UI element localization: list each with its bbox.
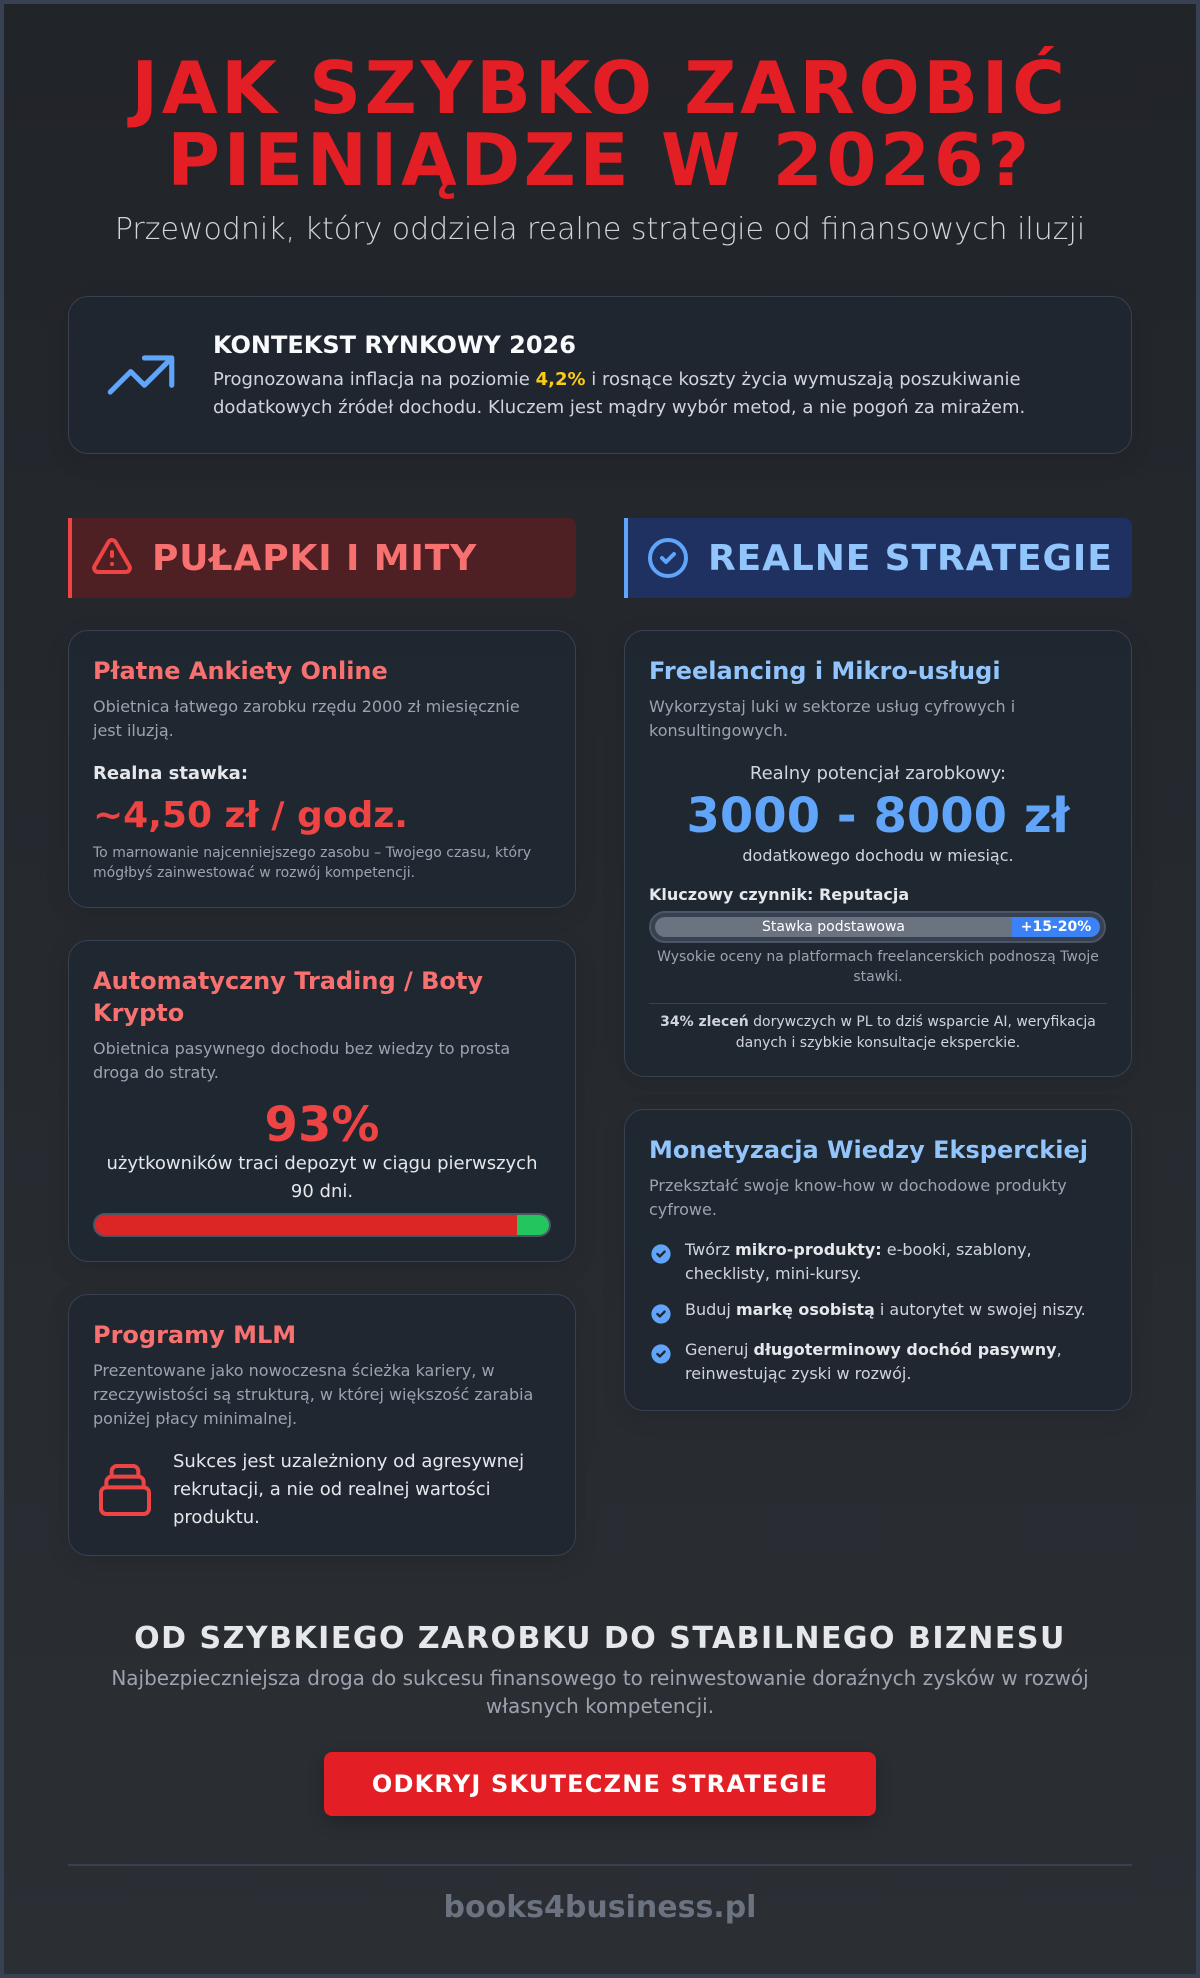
button: call to action [324, 1752, 876, 1816]
card title: Monetyzacja Wiedzy Eksperckiej [649, 1136, 1088, 1164]
icon: warning triangle [92, 538, 132, 574]
title [127, 46, 1069, 202]
panel heading: real strategies [624, 518, 1132, 598]
footer heading: OD SZYBKIEGO ZAROBKU DO STABILNEGO BIZNESU [134, 1621, 1066, 1656]
icon: collection stack [99, 1464, 151, 1516]
title: PIENIĄDZE W 2026? [167, 118, 1033, 202]
card description: Przekształć swoje know-how w dochodowe produkty [649, 1176, 1067, 1195]
panel: automated trading [68, 940, 576, 1262]
panel: freelancing [624, 630, 1132, 1077]
list item 3: reinwestując zyski w rozwój. [685, 1364, 911, 1382]
stat caption: użytkowników traci depozyt w ciągu pierwszych [106, 1153, 538, 1174]
stat caption [106, 1153, 538, 1202]
stat: hourly rate: ~4,50 zł / godz. [93, 794, 408, 836]
text: market context [213, 369, 1025, 418]
text: market context: Prognozowana inflacja na poziomie 4,2% i rosnące koszty życia wymuszają poszukiwanie [213, 369, 1021, 390]
text: recruitment warning [173, 1451, 524, 1528]
note: To marnowanie najcenniejszego zasobu – Twojego czasu, który [93, 845, 531, 861]
panel: paid surveys [68, 630, 576, 908]
bar: reputation rate [649, 911, 1106, 943]
icon: check 3 [651, 1344, 671, 1364]
card title: Programy MLM [93, 1321, 296, 1349]
list item 1 [684, 1240, 1032, 1282]
footer text: własnych kompetencji. [486, 1694, 714, 1718]
list item 3: Generuj długoterminowy dochód pasywny, [685, 1340, 1062, 1358]
heading text: strategies: REALNE STRATEGIE [708, 538, 1113, 578]
card title: Krypto [93, 999, 184, 1027]
card description [649, 1176, 1067, 1219]
card title: Automatyczny Trading / Boty [93, 967, 483, 995]
panel heading: traps and myths [68, 518, 576, 598]
icon: check 1 [651, 1244, 671, 1264]
card title [93, 967, 483, 1027]
card description: Obietnica łatwego zarobku rzędu 2000 zł miesięcznie [93, 697, 520, 716]
stat caption: dodatkowego dochodu w miesiąc. [742, 846, 1014, 864]
icon: check circle [648, 538, 688, 578]
subtitle: Przewodnik, który oddziela realne strategie od finansowych iluzji [115, 212, 1085, 247]
text: AI orders: 34% zleceń dorywczych w PL to dziś wsparcie AI, weryfikacja [660, 1014, 1096, 1030]
button: call to action: ODKRYJ SKUTECZNE STRATEGIE [372, 1770, 828, 1798]
icon: check 2 [651, 1304, 671, 1324]
bar segment: base rate: Stawka podstawowa [762, 919, 905, 935]
note: mógłbyś zainwestować w rozwój kompetencji. [93, 865, 415, 881]
card description [92, 697, 520, 740]
note [92, 845, 531, 881]
card description: konsultingowych. [649, 721, 788, 740]
bar note: stawki. [853, 969, 903, 985]
card description [93, 1039, 510, 1082]
heading text: traps: PUŁAPKI I MITY [152, 538, 477, 578]
card description [649, 697, 1015, 740]
heading: market context: KONTEKST RYNKOWY 2026 [213, 331, 576, 359]
list item 1: checklisty, mini-kursy. [685, 1264, 861, 1282]
bar note [657, 949, 1099, 985]
list item 2: Buduj markę osobistą i autorytet w swojej niszy. [685, 1300, 1086, 1318]
brand logo text: books4business.pl [444, 1890, 756, 1925]
card description: cyfrowe. [649, 1200, 717, 1219]
list item 3 [685, 1340, 1062, 1382]
stat caption: 90 dni. [291, 1181, 353, 1202]
icon: trending up [108, 355, 174, 395]
panel: MLM programs [68, 1294, 576, 1556]
text: AI orders: danych i szybkie konsultacje eksperckie. [736, 1034, 1020, 1050]
card description: Prezentowane jako nowoczesna ścieżka kariery, w [93, 1361, 495, 1380]
progress bar: losers vs winners [93, 1213, 551, 1237]
text: recruitment warning: produktu. [173, 1507, 260, 1528]
card description [93, 1361, 533, 1428]
label: key factor: Kluczowy czynnik: Reputacja [649, 884, 909, 904]
bar segment: bonus [1012, 917, 1100, 937]
footer text: Najbezpieczniejsza droga do sukcesu finansowego to reinwestowanie doraźnych zysków w rozwój [111, 1666, 1089, 1690]
list item 1: Twórz mikro-produkty: e-booki, szablony, [685, 1240, 1032, 1258]
card description: Wykorzystaj luki w sektorze usług cyfrowych i [649, 697, 1015, 716]
card description: rzeczywistości są strukturą, w której większość zarabia [93, 1385, 533, 1404]
card description: jest iluzją. [93, 721, 174, 740]
text: recruitment warning: rekrutacji, a nie od realnej wartości [173, 1479, 491, 1500]
bar note: Wysokie oceny na platformach freelancerskich podnoszą Twoje [657, 949, 1099, 965]
text: recruitment warning: Sukces jest uzależniony od agresywnej [173, 1451, 524, 1472]
card description: poniżej płacy minimalnej. [93, 1409, 297, 1428]
label: real rate: Realna stawka: [93, 763, 248, 784]
footer text [111, 1666, 1089, 1718]
text: AI orders [660, 1014, 1096, 1050]
label: earning potential: Realny potencjał zarobkowy: [750, 763, 1006, 784]
bar segment: bonus: +15-20% [1021, 919, 1091, 935]
stat: income range: 3000 - 8000 zł [686, 788, 1070, 844]
card title: Płatne Ankiety Online [93, 657, 388, 685]
card description: Obietnica pasywnego dochodu bez wiedzy to prosta [93, 1039, 510, 1058]
panel: knowledge monetization [624, 1109, 1132, 1411]
stat: 93 percent: 93% [265, 1097, 379, 1153]
text: market context: dodatkowych źródeł dochodu. Kluczem jest mądry wybór metod, a nie pogoń za mirażem. [213, 397, 1025, 418]
bar segment: base rate [655, 917, 1012, 937]
card title: Freelancing i Mikro-usługi [649, 657, 1001, 685]
title: JAK SZYBKO ZAROBIĆ [131, 46, 1069, 130]
card description: droga do straty. [93, 1063, 219, 1082]
panel: market context [68, 296, 1132, 454]
